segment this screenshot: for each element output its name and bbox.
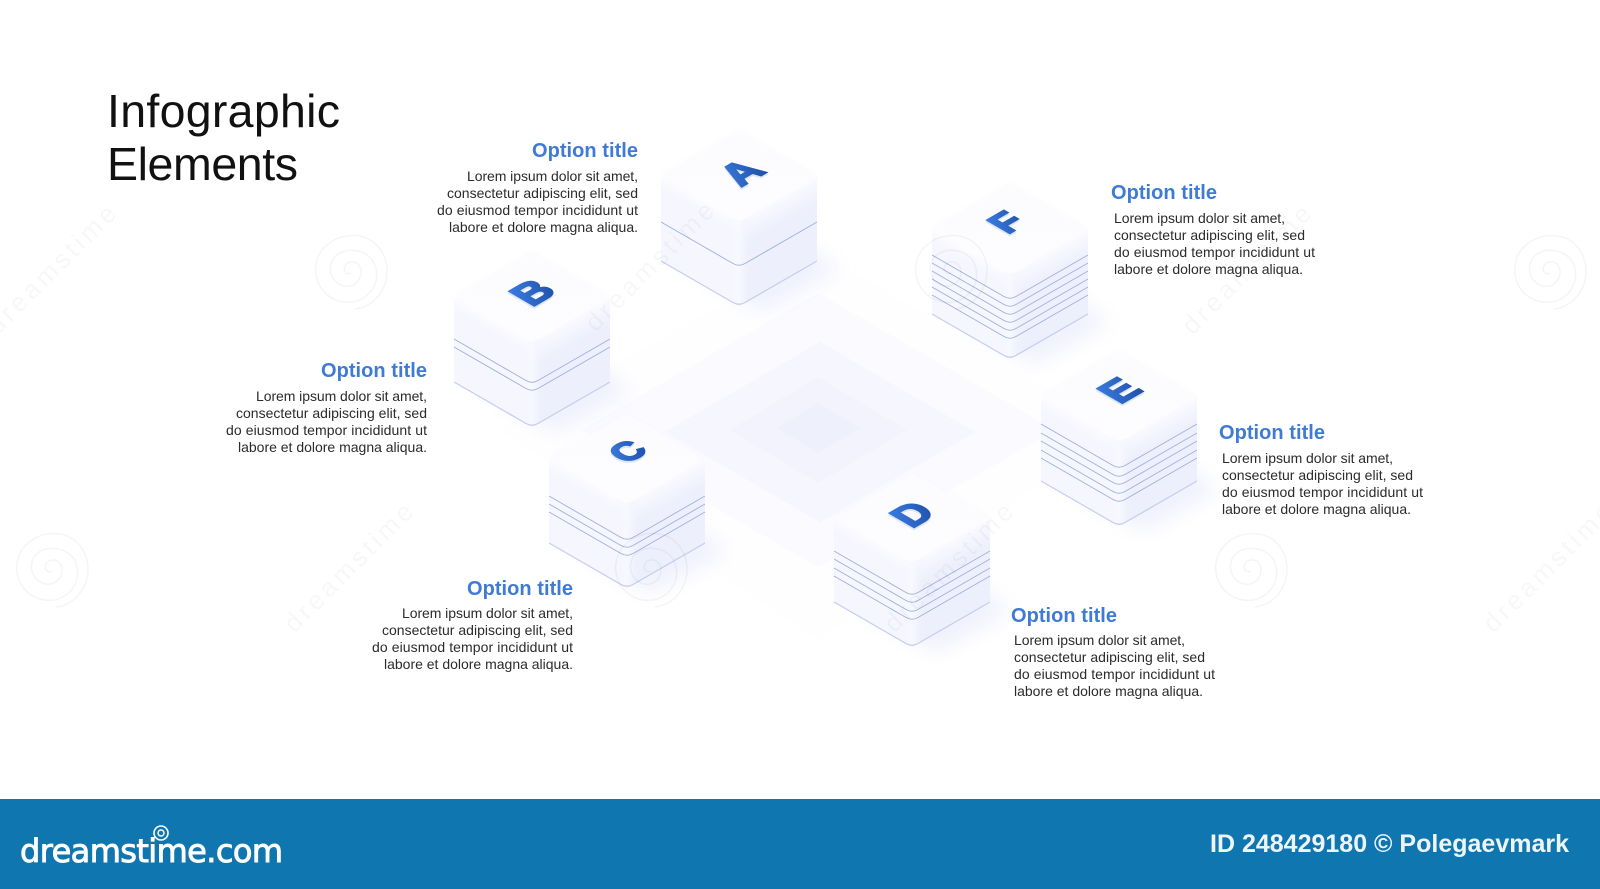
text block E: consectetur adipiscing elit, sed: [1222, 467, 1413, 483]
text block E: Option title: [1219, 422, 1325, 444]
cube D (four layers): [834, 472, 1012, 652]
text block A: consectetur adipiscing elit, sed: [447, 185, 638, 201]
text block C: Lorem ipsum dolor sit amet,: [402, 605, 573, 621]
footer credit: ID 248429180 © Polegaevmark: [1210, 830, 1569, 858]
text block A: do eiusmod tempor incididunt ut: [437, 202, 638, 218]
text block F: do eiusmod tempor incididunt ut: [1114, 244, 1315, 260]
text block B: labore et dolore magna aliqua.: [238, 439, 427, 455]
cube C (three layers): [549, 413, 727, 593]
text block D: Option title: [1011, 605, 1117, 627]
watermark text: dreamstime: [1176, 199, 1317, 340]
text block D: do eiusmod tempor incididunt ut: [1014, 666, 1215, 682]
letter B: B: [499, 273, 566, 312]
title: Elements: [107, 138, 298, 190]
text block E: Lorem ipsum dolor sit amet,: [1222, 450, 1393, 466]
letter E: E: [1087, 371, 1152, 409]
letter F: F: [979, 206, 1036, 239]
watermark text: dreamstime: [579, 196, 720, 337]
text block D: labore et dolore magna aliqua.: [1014, 683, 1203, 699]
text block A: labore et dolore magna aliqua.: [449, 219, 638, 235]
cube B (two layers): [454, 252, 632, 432]
text block A: Lorem ipsum dolor sit amet,: [467, 168, 638, 184]
text block C: Option title: [467, 578, 573, 600]
text block C: labore et dolore magna aliqua.: [384, 656, 573, 672]
text block E: do eiusmod tempor incididunt ut: [1222, 484, 1423, 500]
text block E: [1219, 422, 1423, 517]
title: Infographic: [107, 85, 340, 137]
cube F (six layers): [932, 184, 1110, 364]
text block F: consectetur adipiscing elit, sed: [1114, 227, 1305, 243]
watermark spirals: [17, 236, 1586, 607]
watermark text: [0, 196, 1600, 638]
text block C: [372, 578, 573, 672]
central isometric platform: [500, 250, 1115, 640]
text block B: Option title: [321, 360, 427, 382]
text block E: labore et dolore magna aliqua.: [1222, 501, 1411, 517]
title: [107, 85, 340, 190]
watermark text: dreamstime: [278, 497, 419, 638]
text block C: consectetur adipiscing elit, sed: [382, 622, 573, 638]
letter D: D: [880, 495, 945, 533]
text block D: consectetur adipiscing elit, sed: [1014, 649, 1205, 665]
text block F: Lorem ipsum dolor sit amet,: [1114, 210, 1285, 226]
text block B: do eiusmod tempor incididunt ut: [226, 422, 427, 438]
letter A: A: [708, 153, 775, 192]
text block B: Lorem ipsum dolor sit amet,: [256, 388, 427, 404]
text block D: Lorem ipsum dolor sit amet,: [1014, 632, 1185, 648]
text block B: consectetur adipiscing elit, sed: [236, 405, 427, 421]
letter C: C: [598, 434, 656, 468]
text block F: labore et dolore magna aliqua.: [1114, 261, 1303, 277]
cube A (one layer): [661, 131, 839, 311]
text block F: Option title: [1111, 182, 1217, 204]
text block F: [1111, 182, 1315, 277]
text block D: [1011, 605, 1215, 699]
cube E (five layers): [1041, 351, 1219, 531]
text block A: Option title: [532, 140, 638, 162]
footer logo: dreamstime.com: [20, 832, 283, 870]
text block B: [226, 360, 427, 455]
text block C: do eiusmod tempor incididunt ut: [372, 639, 573, 655]
footer band: [0, 799, 1600, 889]
text block A: [437, 140, 638, 235]
watermark text: dreamstime: [878, 497, 1019, 638]
